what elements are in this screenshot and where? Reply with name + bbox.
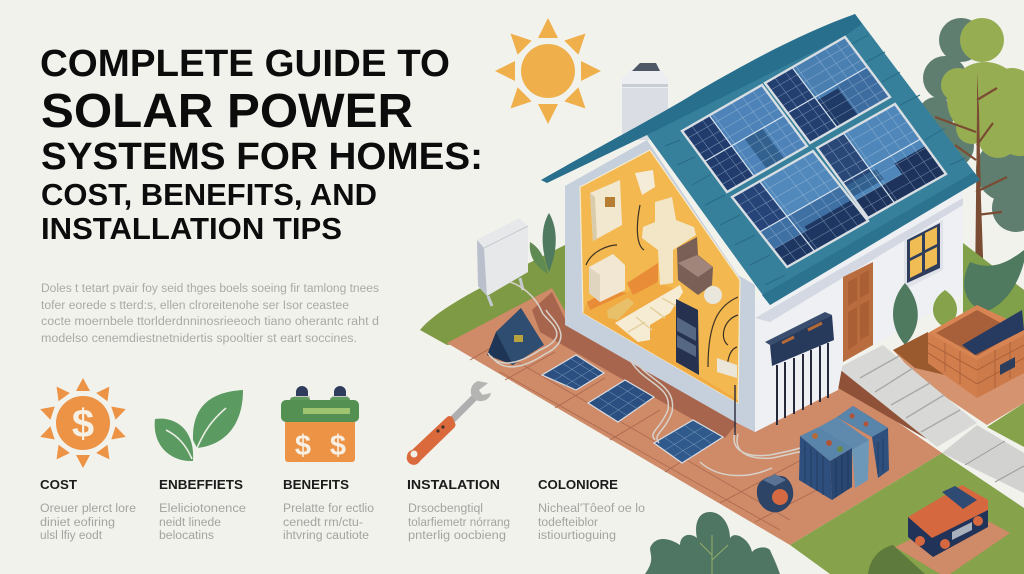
cables — [488, 282, 800, 476]
steps — [838, 345, 977, 447]
wall shadow under roof — [755, 198, 963, 322]
house — [541, 14, 980, 432]
feature: enbeffiets: belocatins — [159, 530, 214, 542]
interior: breakers — [717, 358, 737, 378]
feature: coloniore — [538, 477, 645, 542]
feature: enbeffiets — [159, 477, 246, 542]
concrete path — [942, 425, 1024, 493]
feature: enbeffiets: ENBEFFIETS — [159, 477, 243, 492]
icon: sun with dollar: $ — [72, 402, 94, 446]
inverters with wires — [765, 312, 834, 425]
device: monitor on path — [487, 308, 544, 365]
brick path — [447, 288, 1024, 545]
plants: by window — [893, 250, 1024, 345]
interior: dark cabinet — [676, 299, 699, 375]
battery: front — [799, 427, 852, 500]
feature: benefits — [283, 477, 374, 542]
icon: sun with dollar — [38, 378, 128, 468]
icon: leaves — [155, 390, 243, 461]
feature: cost: Oreuer plerct lore — [40, 503, 136, 515]
interior: meters box — [635, 170, 655, 195]
feature: coloniore: todefteiblor — [538, 517, 598, 529]
interior: wiring — [637, 205, 738, 372]
path solar panel 1 — [542, 355, 604, 390]
feature: benefits: cenedt rm/ctu- — [283, 517, 363, 529]
path solar panel 2 — [588, 380, 654, 422]
icon: wrench — [407, 381, 491, 465]
plant: left of house — [530, 213, 556, 274]
feature: benefits: ihtvring cautiote — [283, 530, 369, 542]
chimney — [622, 63, 668, 140]
batteries — [757, 406, 889, 512]
wall: right side — [755, 190, 963, 432]
title: COST, BENEFITS, AND — [41, 177, 377, 212]
battery: middle — [819, 417, 869, 488]
roof — [541, 14, 980, 305]
title: SOLAR POWER — [41, 85, 413, 138]
path solar panel 3 — [654, 420, 723, 463]
lawn: upper right — [963, 243, 1024, 360]
wall: gable front — [565, 140, 755, 432]
feature: coloniore: COLONIORE — [538, 477, 618, 492]
icon: battery with dollars: $ — [330, 430, 346, 462]
icon: battery with dollars: $ — [295, 430, 311, 462]
tree: bottom — [645, 512, 780, 574]
feature: benefits: BENEFITS — [283, 477, 349, 492]
tree: right — [918, 18, 1024, 285]
interior wall — [580, 150, 740, 403]
title: INSTALLATION TIPS — [41, 211, 342, 246]
interior floor — [583, 283, 738, 403]
intro paragraph: modelso cenemdiestnetnidertis spooltier st eart soccines. — [41, 333, 357, 345]
feature: installation — [407, 477, 510, 542]
feature: cost — [40, 477, 136, 542]
feature: benefits: Prelatte for ectlio — [283, 503, 374, 515]
title: COMPLETE GUIDE TO — [40, 43, 450, 85]
icon: battery with dollars — [281, 386, 359, 462]
interior: brown furniture — [677, 237, 713, 295]
lawn: right corner — [987, 403, 1024, 447]
interior: gauge — [704, 286, 722, 304]
feature: installation: pnterlig oocbieng — [408, 530, 506, 542]
feature: installation: tolarfiemetr nórrang — [408, 517, 510, 529]
window — [904, 220, 943, 290]
solar panels on roof — [682, 37, 946, 267]
battery: back — [837, 406, 889, 478]
orange battery — [895, 485, 1010, 574]
feature: cost: ulsl lfiy eodt — [40, 530, 103, 542]
interior: electrical panel — [590, 180, 622, 241]
feature: coloniore: istiourtioguing — [538, 530, 616, 542]
intro paragraph: cocte moernbele ttorlderdnninosrieeoch tiano oherantc raht d — [41, 316, 379, 328]
panel: upper left — [682, 85, 807, 192]
panel: lower right — [817, 104, 946, 218]
interior: cream cabinets — [642, 197, 696, 285]
feature: cost: diniet eofiring — [40, 517, 115, 529]
interior: second box — [586, 245, 625, 302]
interior: stairs — [615, 285, 683, 342]
feature: coloniore: Nicheal'Tôeof oe lo — [538, 503, 645, 515]
feature: installation: Drsocbengtiql — [408, 503, 483, 515]
title — [40, 43, 483, 246]
lawn: lower right — [790, 453, 1024, 574]
feature: installation: INSTALATION — [407, 477, 500, 492]
intro paragraph: tofer eorede s tterd:s, ellen clroreitenohe ser Isor ceastee — [41, 300, 349, 312]
lawn: upper left — [420, 245, 575, 345]
icon: sun — [495, 18, 601, 124]
panel: upper right — [765, 37, 890, 143]
brick planter — [928, 305, 1024, 398]
intro paragraph — [41, 283, 379, 345]
feature: enbeffiets: Eleliciotonence — [159, 503, 246, 515]
intro paragraph: Doles t tetart pvair foy seid thges boels soeing fir tamlong tnees — [41, 283, 379, 295]
white box unit — [477, 218, 528, 306]
door — [843, 262, 873, 362]
interior: toolbox — [607, 298, 634, 320]
feature: enbeffiets: neidt linede — [159, 517, 221, 529]
panel: lower left — [732, 151, 868, 267]
small charger — [757, 474, 793, 512]
title: SYSTEMS FOR HOMES: — [41, 136, 483, 178]
feature: cost: COST — [40, 477, 77, 492]
planter hollow ground — [893, 332, 945, 375]
